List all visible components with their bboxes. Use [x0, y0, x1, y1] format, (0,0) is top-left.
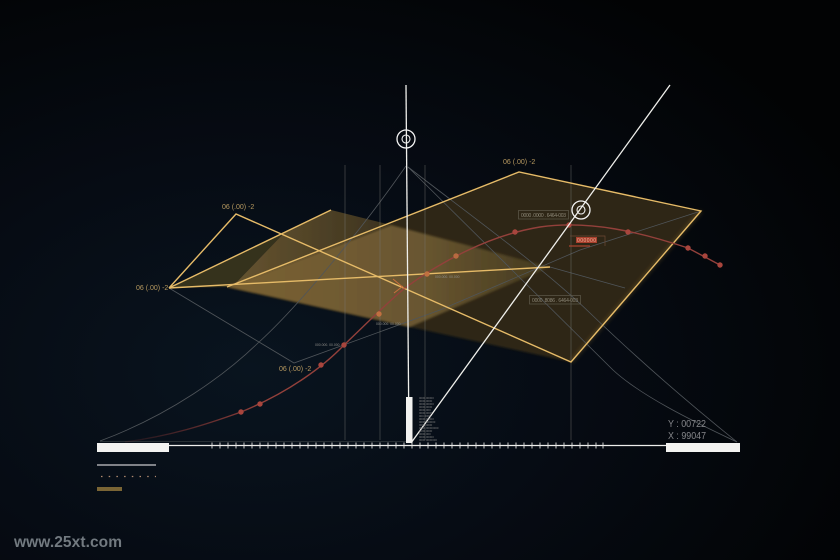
data callout top [518, 210, 568, 219]
panel: large amber plane [227, 172, 701, 362]
axis with end bars and ticks [97, 442, 740, 452]
small point labels: 000.000. 00.000 [435, 275, 460, 279]
data callout lower [530, 296, 580, 304]
legend: red dotted line [101, 476, 156, 478]
panel: dark wing of second plane [169, 232, 285, 288]
tiny data column: 0000.000000 [419, 420, 436, 424]
panel: bright overlap band [227, 225, 550, 327]
coordinate readout: X : 99047 [668, 431, 706, 442]
plane labels: 06 (.00) -2 [136, 285, 168, 292]
plane labels: 06 (.00) -2 [279, 366, 311, 373]
amber edge glow [571, 211, 701, 362]
amber outlines [169, 172, 701, 362]
small point labels: 000.000. 00.000 [315, 343, 340, 347]
panel: medium wedge of second plane [232, 210, 391, 287]
tiny data column: 0000.0000 [419, 399, 433, 403]
grey guide lines [100, 166, 737, 442]
tiny data column: 0000.000 [419, 408, 431, 412]
small point labels: 000.000. 00.000 [376, 322, 401, 326]
data callout top: 0000 .0000 . 6464-003 [521, 213, 566, 219]
tiny data column: 0000.0000000 [419, 438, 437, 442]
white marker bar [406, 397, 412, 443]
legend: amber swatch [97, 487, 122, 491]
coordinate readout: Y : 00722 [668, 419, 706, 430]
tiny data column: 0000.0000 [419, 405, 433, 409]
tiny data column: 0000.0000 [419, 429, 433, 433]
chart: planes and curves [100, 85, 737, 443]
watermark: www.25xt.com [13, 534, 122, 551]
tiny data column: 0000.0000 [419, 411, 433, 415]
red curve with data points [125, 222, 723, 442]
white diagonal pointer [411, 85, 670, 443]
vertical guide lines [345, 165, 571, 440]
small point labels [315, 275, 460, 347]
tiny data column: 0000.00000 [419, 402, 434, 406]
legend: white line [97, 464, 156, 466]
tiny data column: 000.0000 [419, 414, 431, 418]
plane labels: 06 (.00) -2 [503, 159, 535, 166]
red highlight callout: 000000 [577, 238, 596, 244]
data callout lower: 0000 .8086 . 6464-003 [532, 298, 578, 304]
legend [97, 465, 156, 491]
tiny data column: 0000.00000 [419, 435, 434, 439]
coordinate readout [668, 419, 706, 442]
tiny data column: 0000.00000 [419, 417, 434, 421]
plane labels: 06 (.00) -2 [222, 204, 254, 211]
tiny data column: 0000.00000000 [419, 426, 439, 430]
white vertical pointer [397, 85, 415, 443]
tiny data column: 0000.000 [419, 432, 431, 436]
tiny data column [419, 396, 439, 442]
red highlight callout [569, 236, 605, 246]
tiny data column: 0000.0000 [419, 423, 433, 427]
tiny data column: 0000.00000 [419, 396, 434, 400]
plane labels [136, 159, 535, 373]
